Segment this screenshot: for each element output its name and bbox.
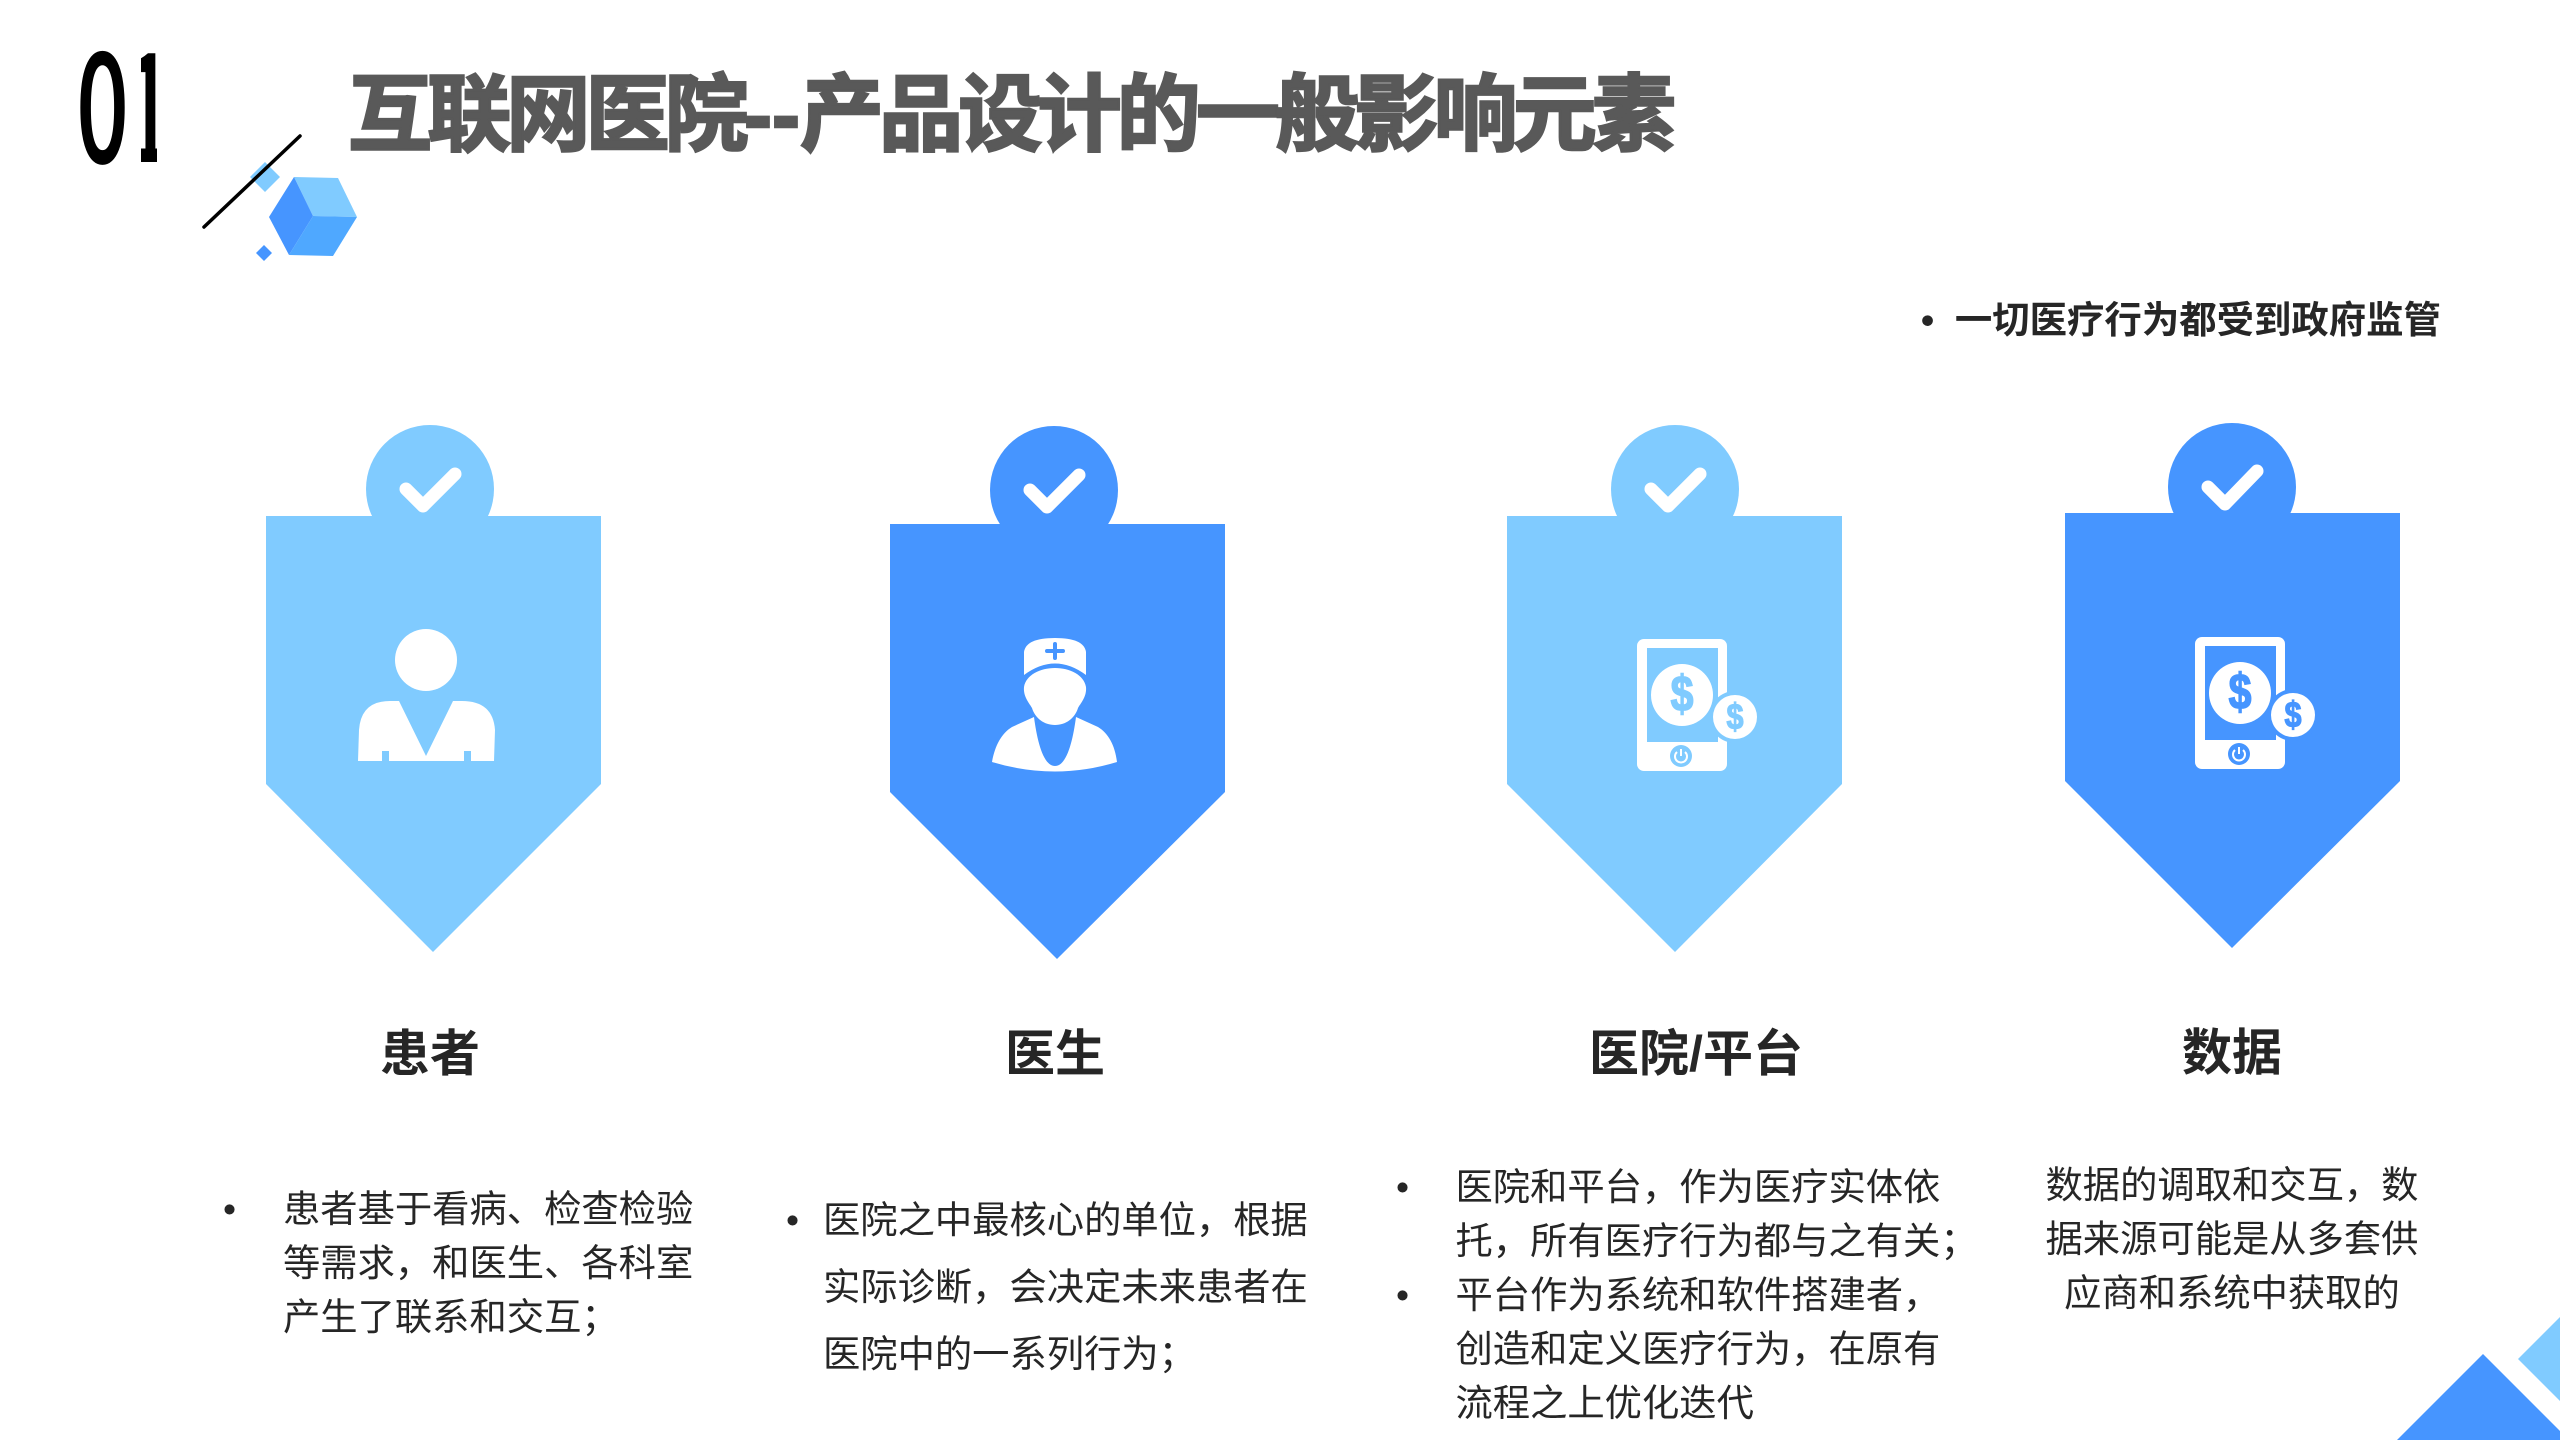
title: 互联网医院--产品设计的一般影响元素 — [348, 68, 1671, 162]
text: patient description: 患者基于看病、检查检验 — [283, 1188, 693, 1230]
text: hospital platform description: • — [1396, 1166, 1409, 1208]
text: patient description: • — [223, 1188, 236, 1230]
text: patient description: 等需求，和医生、各科室 — [283, 1242, 693, 1284]
icon: check mark — [406, 474, 455, 506]
text: hospital platform description — [1396, 1166, 1978, 1424]
icon: tablet with coins — [2195, 637, 2319, 769]
text: hospital platform description: 创造和定义医疗行为，在原有 — [1456, 1328, 1940, 1370]
icon: check mark — [1030, 475, 1079, 507]
text: hospital platform description: 流程之上优化迭代 — [1456, 1382, 1754, 1424]
text: hospital platform description: • — [1396, 1274, 1409, 1316]
icon: check mark — [2208, 471, 2257, 504]
text: data description — [2046, 1164, 2418, 1314]
icon: patient — [358, 629, 495, 761]
heading: hospital platform: 医院/平台 — [1589, 1026, 1803, 1082]
panel: data shield — [2065, 423, 2400, 948]
icon: doctor — [992, 638, 1117, 772]
panel: doctor shield — [890, 426, 1225, 959]
decorative corner shapes — [2397, 1317, 2560, 1440]
heading: data: 数据 — [2182, 1025, 2282, 1081]
icon: decorative cube with line — [204, 136, 357, 261]
heading: doctor: 医生 — [1005, 1026, 1105, 1082]
heading: patient: 患者 — [380, 1026, 480, 1082]
icon: tablet with coins: $ — [1671, 666, 1693, 722]
panel: patient shield — [266, 425, 601, 952]
panel: hospital platform shield — [1507, 425, 1842, 952]
icon: tablet with coins: $ — [1726, 698, 1744, 738]
icon: tablet with coins — [1637, 639, 1761, 771]
text: doctor description — [786, 1199, 1308, 1375]
text: patient description: 产生了联系和交互； — [283, 1296, 619, 1338]
text: hospital platform description: 平台作为系统和软件搭建者， — [1456, 1274, 1940, 1316]
text: patient description — [223, 1188, 693, 1338]
icon: check mark — [1651, 474, 1700, 506]
text: doctor description: • — [786, 1199, 799, 1241]
note: government regulation: • 一切医疗行为都受到政府监管 — [1921, 299, 2441, 341]
text: hospital platform description: 托，所有医疗行为都与之有关； — [1456, 1220, 1978, 1262]
text: data description: 应商和系统中获取的 — [2064, 1272, 2400, 1314]
section number 01 — [80, 50, 157, 165]
icon: tablet with coins: $ — [2229, 664, 2251, 720]
text: doctor description: 实际诊断，会决定未来患者在 — [823, 1266, 1308, 1308]
text: doctor description: 医院之中最核心的单位，根据 — [823, 1199, 1308, 1241]
text: doctor description: 医院中的一系列行为； — [823, 1333, 1196, 1375]
icon: tablet with coins: $ — [2284, 696, 2302, 736]
text: hospital platform description: 医院和平台，作为医疗实体依 — [1456, 1166, 1940, 1208]
text: data description: 据来源可能是从多套供 — [2046, 1218, 2418, 1260]
text: data description: 数据的调取和交互，数 — [2046, 1164, 2418, 1206]
